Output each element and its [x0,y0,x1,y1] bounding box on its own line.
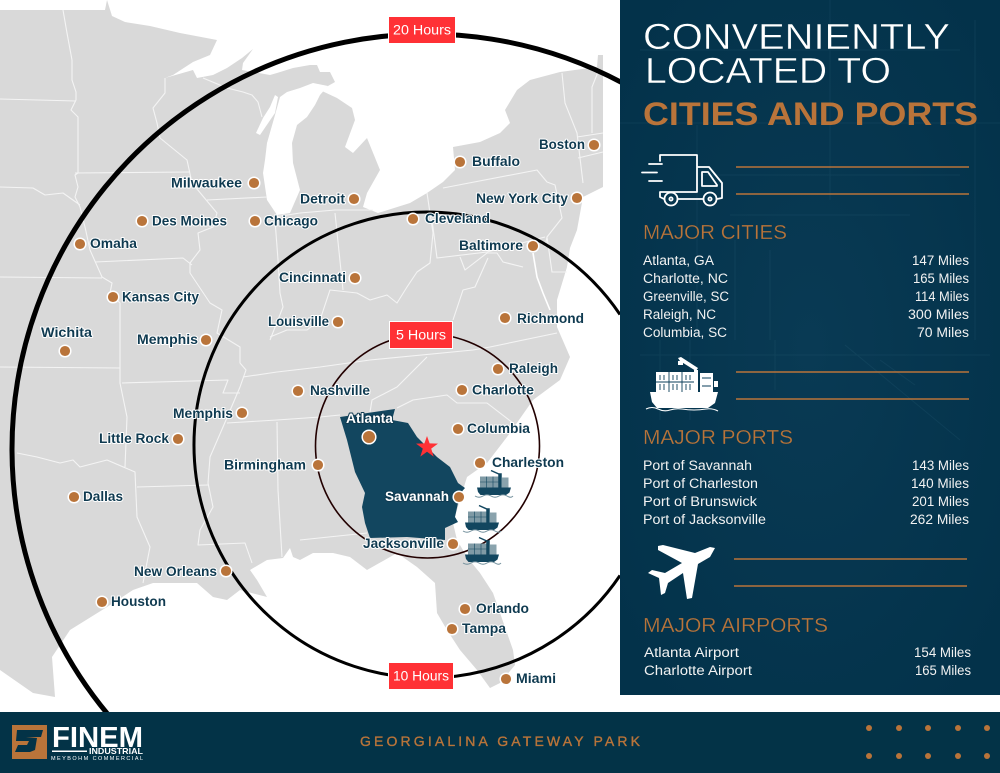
title: LOCATED TO [645,50,891,91]
icon: port ship near Charleston [475,470,513,497]
city markers and labels: Omaha [90,236,137,251]
list: major ports: Port of Brunswick [643,494,757,509]
city markers and labels: Milwaukee [171,176,243,190]
city markers and labels: Louisville [268,314,329,329]
list: major cities: Charlotte, NC [643,271,728,286]
list: major airports: 154 Miles [914,645,971,660]
badge: 20 hours: 20 Hours [393,22,451,38]
list: major ports: 140 Miles [911,476,969,491]
footer title: GEORGIALINA GATEWAY PARK [360,733,641,749]
footer bar [0,712,1000,773]
city markers and labels: Miami [516,671,556,686]
city markers and labels: Cleveland [425,211,490,226]
city markers and labels: New York City [476,191,569,206]
star: site location [416,436,438,457]
city markers and labels: Baltimore [459,238,523,253]
list: major ports [643,458,969,527]
Green Bay [256,95,278,135]
city markers and labels: Nashville [310,383,370,398]
logo: Finem Industrial: INDUSTRIAL [89,746,143,756]
city markers and labels: Chicago [264,214,318,228]
list: major cities [643,253,969,340]
list: major ports: 201 Miles [912,494,969,509]
city markers and labels: Cincinnati [279,270,346,285]
list: major cities: Greenville, SC [643,289,729,304]
list: major ports: Port of Jacksonville [643,512,766,527]
city markers and labels: Atlanta [346,411,393,426]
list: major airports: 165 Miles [915,663,971,678]
Lake Michigan [263,83,328,215]
city markers and labels: Orlando [476,601,529,616]
heading: major ports: MAJOR PORTS [643,427,793,449]
list: major cities: Columbia, SC [643,325,727,340]
city markers and labels: Richmond [517,311,584,326]
list: major cities: 300 Miles [908,307,969,322]
city markers and labels: Houston [111,594,166,609]
badge: 5 hours [390,322,452,348]
map of eastern United States [0,0,603,697]
list: major ports: Port of Charleston [643,476,758,491]
city markers and labels: Dallas [83,489,123,504]
city markers and labels: Little Rock [99,431,169,446]
title [643,16,978,132]
badge: 10 hours [388,662,454,690]
list: major airports: Atlanta Airport [644,645,739,660]
icon: port ship near Savannah [463,506,501,532]
list: major cities: Raleigh, NC [643,307,716,322]
icon: truck [642,155,722,206]
list: major cities: 165 Miles [913,271,969,286]
badge: 5 hours: 5 Hours [396,328,446,342]
title: CITIES AND PORTS [643,96,978,132]
list: major ports: 143 Miles [912,458,969,473]
panel: cities and ports [620,0,1000,695]
city markers and labels: Savannah [385,489,449,504]
list: major cities: 147 Miles [912,253,969,268]
logo: Finem Industrial: FINEM [52,722,143,754]
city markers and labels: Memphis [137,332,198,347]
city markers and labels: Detroit [300,192,346,206]
logo: Finem Industrial: MEYBOHM COMMERCIAL [51,756,143,762]
heading: major airports: MAJOR AIRPORTS [643,615,828,637]
drive-time ring: 20 hours [12,34,622,714]
list: major cities: 70 Miles [917,325,969,340]
icon: cargo ship [646,357,718,411]
decorative dots [866,725,990,759]
icon: port ship near Jacksonville [463,538,501,564]
heading: major cities: MAJOR CITIES [643,222,787,244]
city markers and labels: Boston [539,137,585,152]
list: major cities: 114 Miles [915,289,969,304]
drive-time ring: 10 hours [194,212,620,678]
city markers and labels: Tampa [462,621,507,636]
list: major airports [644,645,971,678]
list: major ports: 262 Miles [910,512,969,527]
badge: 10 hours: 10 Hours [393,668,449,684]
city markers and labels: Raleigh [509,361,558,376]
icon: airplane [648,545,715,599]
logo: Finem Industrial [12,722,143,762]
city markers and labels: Buffalo [472,154,520,169]
badge: 20 hours [388,16,456,44]
city markers and labels: Des Moines [152,214,227,228]
list: major ports: Port of Savannah [643,458,752,473]
city markers and labels [41,137,600,686]
Georgia state highlight [340,409,465,540]
city markers and labels: Memphis [173,406,233,421]
drive-time ring: 5 hours [316,334,540,558]
city markers and labels: Jacksonville [363,536,444,551]
city markers and labels: New Orleans [134,564,217,579]
city markers and labels: Columbia [467,421,530,436]
title: CONVENIENTLY [643,16,950,57]
city markers and labels: Charleston [492,455,564,470]
city markers and labels: Wichita [41,325,93,340]
list: major cities: Atlanta, GA [643,253,714,268]
city markers and labels: Charlotte [472,382,535,398]
city markers and labels: Birmingham [224,458,306,472]
city markers and labels: Kansas City [122,290,199,304]
list: major airports: Charlotte Airport [644,663,752,678]
